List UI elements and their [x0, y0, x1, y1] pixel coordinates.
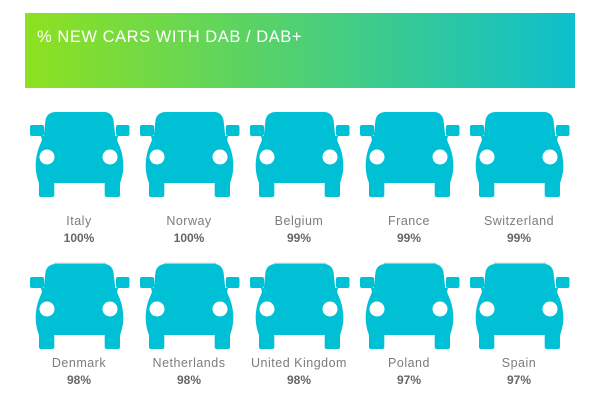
Norway: 100%: [174, 231, 205, 245]
Italy: Italy: [66, 214, 92, 228]
United Kingdom: [250, 264, 350, 387]
Switzerland: [470, 112, 570, 245]
title text: % NEW CARS WITH DAB / DAB+: [37, 28, 302, 46]
Netherlands: [140, 264, 240, 387]
Poland: 97%: [397, 373, 421, 387]
United Kingdom: United Kingdom: [251, 356, 347, 370]
Norway: Norway: [166, 214, 212, 228]
Italy: [30, 112, 130, 245]
Italy: 100%: [64, 231, 95, 245]
Netherlands: 98%: [177, 373, 201, 387]
Belgium: Belgium: [275, 214, 323, 228]
Poland: Poland: [388, 356, 430, 370]
France: 99%: [397, 231, 421, 245]
United Kingdom: 98%: [287, 373, 311, 387]
Belgium: [250, 112, 350, 245]
France: [360, 112, 460, 245]
Denmark: Denmark: [52, 356, 106, 370]
Belgium: 99%: [287, 231, 311, 245]
Denmark: 98%: [67, 373, 91, 387]
Switzerland: Switzerland: [484, 214, 554, 228]
Spain: Spain: [502, 356, 536, 370]
Netherlands: Netherlands: [153, 356, 225, 370]
Norway: [140, 112, 240, 245]
Spain: [470, 264, 570, 387]
Spain: 97%: [507, 373, 531, 387]
Switzerland: 99%: [507, 231, 531, 245]
Denmark: [30, 264, 130, 387]
title banner: [25, 13, 575, 88]
France: France: [388, 214, 430, 228]
Poland: [360, 264, 460, 387]
